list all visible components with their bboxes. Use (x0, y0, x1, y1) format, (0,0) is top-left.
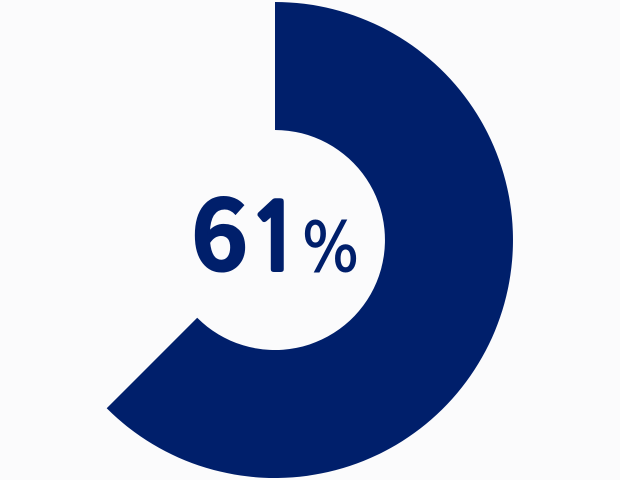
number 61: 6 (191, 157, 248, 298)
donut arc (107, 2, 513, 478)
percent sign: % (302, 208, 359, 288)
number 61: 1 (247, 192, 303, 284)
value label (191, 157, 359, 298)
